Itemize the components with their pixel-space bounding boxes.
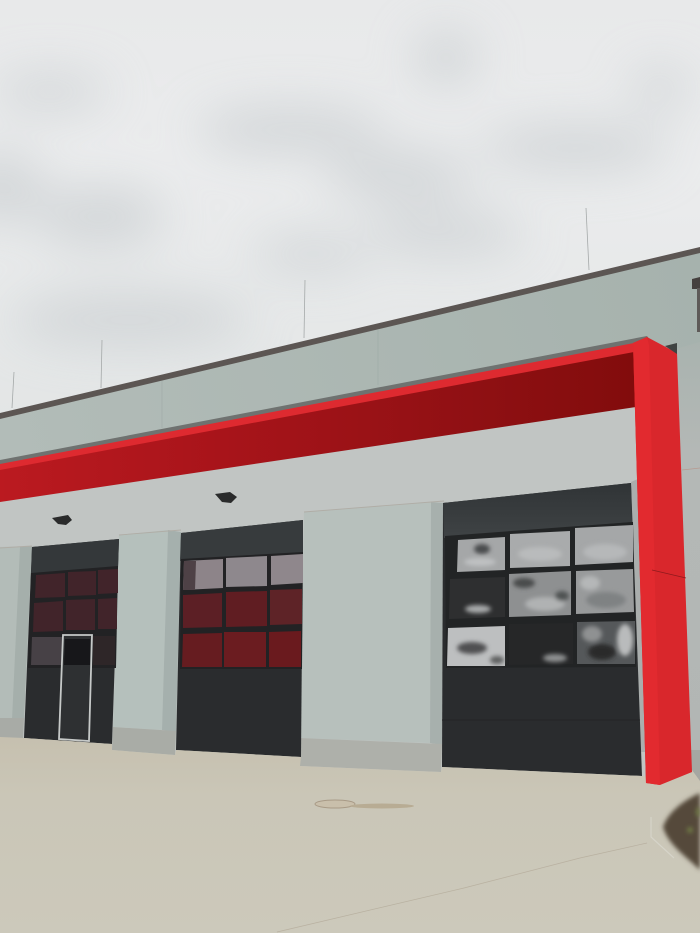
window panes — [447, 525, 635, 666]
reflections in panes — [457, 544, 633, 664]
upper fascia wall — [0, 250, 700, 520]
red canopy highlight — [0, 341, 635, 470]
red canopy underside — [0, 351, 636, 502]
plinth: centre right — [300, 738, 442, 772]
lower wall — [0, 403, 648, 790]
canopy grey flashing — [0, 336, 650, 464]
sky — [0, 0, 700, 480]
manhole — [315, 800, 414, 808]
wall seam lines — [0, 501, 444, 548]
middle door — [176, 520, 303, 757]
red column — [633, 337, 692, 785]
right side wall — [672, 342, 700, 790]
roof edge — [0, 247, 700, 419]
drainpipe bracket — [692, 277, 700, 332]
planting bed — [651, 793, 700, 870]
wall lamps — [52, 492, 237, 525]
plinth: far left — [0, 718, 24, 740]
plinth: centre left — [112, 727, 176, 755]
left door — [24, 539, 119, 744]
right door — [442, 483, 642, 776]
flashing corner — [665, 343, 677, 354]
fascia panel seams — [162, 330, 378, 428]
crack in ground — [277, 843, 647, 932]
antennas — [12, 208, 589, 408]
pillars — [0, 478, 647, 772]
ground — [0, 737, 700, 933]
small entry door — [59, 635, 92, 741]
